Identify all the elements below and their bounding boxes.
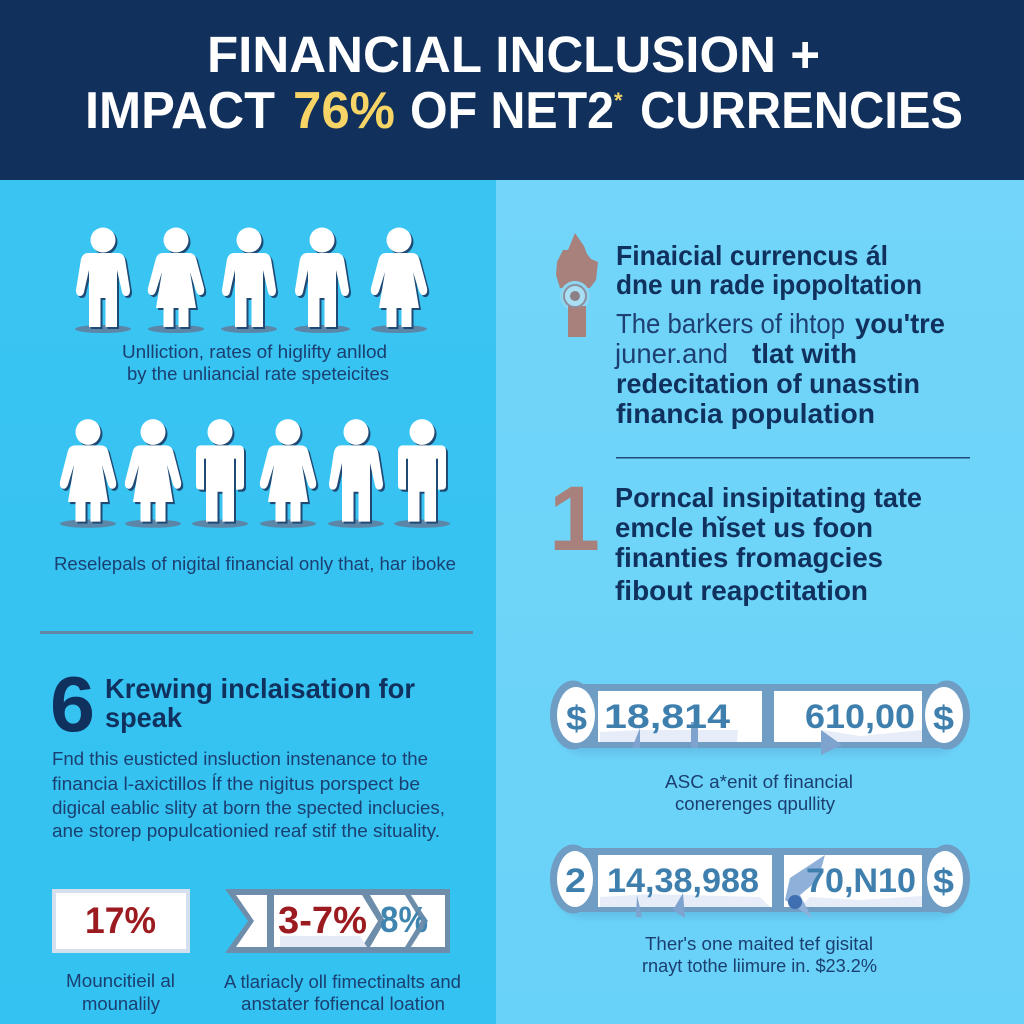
panel: left background (0, 180, 496, 1024)
caption: bar 1: conerenges qpullity (675, 793, 836, 814)
caption: chevron: A tlariacly oll fimectinalts and (224, 971, 461, 992)
chevron stat: 3-7% 8% (225, 889, 450, 953)
paragraph: barriers: juner.and (614, 338, 728, 369)
panel: right background (496, 180, 1024, 1024)
caption: people row 1: by the unliancial rate speteicites (127, 363, 389, 384)
currency bar 2: 2 (565, 862, 586, 900)
title line 2: * (614, 88, 623, 113)
title line 2: CURRENCIES (640, 82, 963, 140)
caption: bar 2: rnayt tothe liimure in. $23.2% (642, 955, 877, 976)
currency bar 2: 70,N10 (806, 862, 916, 900)
paragraph: barriers: The barkers of ihtop (616, 308, 845, 339)
header band (0, 0, 1024, 180)
big number 6: 6 (50, 660, 95, 748)
paragraph: left: digical eablic slity at born the spected inclucies, (52, 797, 445, 818)
caption: chevron (224, 971, 461, 1014)
title line 1: FINANCIAL INCLUSION + (207, 26, 820, 83)
title line 2: OF NET2 (410, 82, 614, 140)
caption: chevron: anstater fofiencal loation (241, 993, 445, 1014)
title line 2 (85, 82, 963, 140)
people row 1 (75, 228, 429, 333)
paragraph: barriers: redecitation of unasstin (616, 368, 920, 399)
heading: growing inclusion (105, 673, 415, 733)
currency bar 1: 610,00 (805, 698, 915, 736)
currency bar 1: $ (566, 700, 587, 738)
paragraph: barriers: tlat with (752, 338, 857, 369)
paragraph: barriers: financia population (616, 398, 875, 429)
heading: personal inspiration (615, 482, 922, 606)
currency bar 1: $ (933, 700, 954, 738)
caption: bar 1: ASC a*enit of financial (665, 771, 853, 792)
currency bar 1 (550, 680, 970, 755)
caption: people row 1 (122, 341, 389, 384)
currency bar 2 (550, 844, 970, 918)
heading: financial currencies: Finaicial currencus ál (616, 240, 888, 271)
paragraph: barriers (614, 308, 945, 429)
title line 2: IMPACT (85, 82, 275, 140)
stat box: 17% (54, 891, 188, 951)
caption: people row 2: Reselepals of nigital financial only that, har iboke (54, 553, 456, 574)
paragraph: left: ane storep populcationied reaf stif the situality. (52, 820, 440, 841)
heading: growing inclusion: speak (105, 702, 182, 733)
caption: people row 1: Unlliction, rates of higlifty anllod (122, 341, 387, 362)
caption: bar 2: Ther's one maited tef gisital (645, 933, 873, 954)
heading: personal inspiration: emcle hǐset us foon (615, 512, 873, 543)
caption: 17%: Mouncitieil al (66, 970, 175, 991)
currency bar 2: $ (933, 863, 954, 901)
heading: financial currencies (616, 240, 922, 300)
heading: financial currencies: dne un rade ipopoltation (616, 269, 922, 300)
stat box: 17%: 17% (85, 900, 156, 941)
heading: growing inclusion: Krewing inclaisation for (105, 673, 415, 704)
heading: personal inspiration: Porncal insipitating tate (615, 482, 922, 513)
caption: 17% (66, 970, 175, 1014)
title line 2: 76% (293, 82, 395, 140)
paragraph: barriers: you'tre (855, 308, 945, 339)
caption: bar 1 (665, 771, 853, 814)
heading: personal inspiration: finanties fromagcies (615, 542, 883, 573)
chevron stat: 3-7% 8%: 3-7% (278, 900, 367, 942)
paragraph: left (52, 748, 445, 841)
people row 2 (60, 419, 450, 528)
heading: personal inspiration: fibout reapctitation (615, 575, 868, 606)
currency bar 2: 14,38,988 (607, 862, 759, 900)
currency bar 1: 18,814 (604, 698, 730, 736)
caption: bar 2 (642, 933, 877, 976)
caption: 17%: mounalily (82, 993, 161, 1014)
big number 1: 1 (549, 468, 600, 570)
paragraph: left: Fnd this eusticted insluction instenance to the (52, 748, 428, 769)
paragraph: left: financia l-axictillos ĺf the nigitus porspect be (52, 773, 420, 794)
chevron stat: 3-7% 8%: 8% (380, 899, 428, 940)
icon: torch (556, 233, 598, 337)
